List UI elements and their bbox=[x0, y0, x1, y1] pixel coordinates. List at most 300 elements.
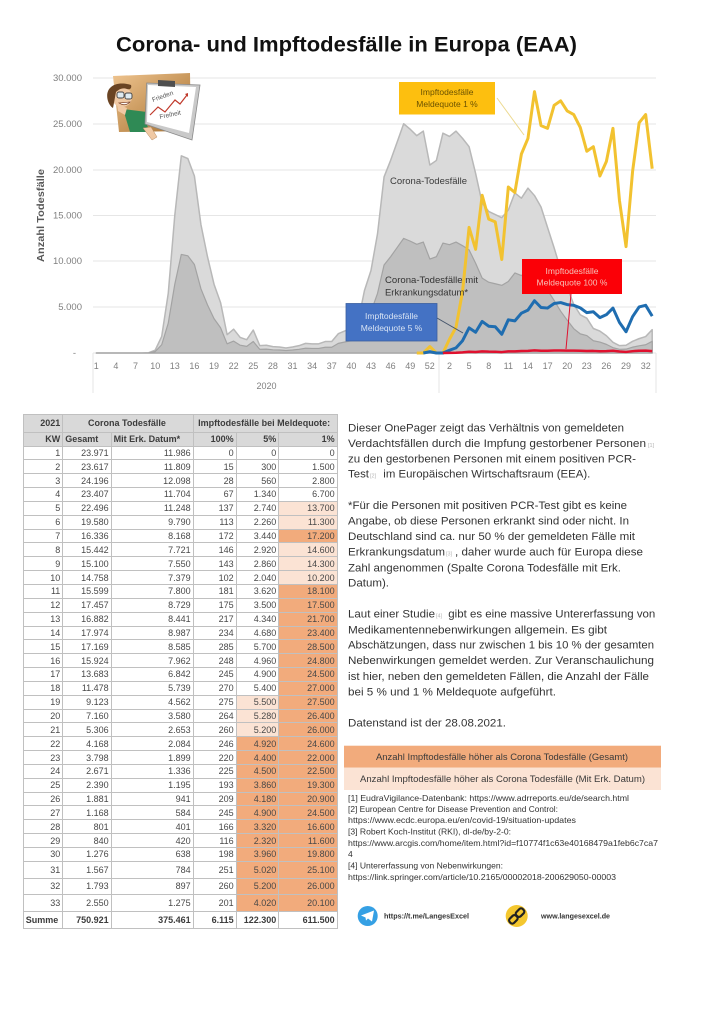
data table: weekly deaths 2021: 4.340 bbox=[254, 614, 276, 624]
data table: weekly deaths 2021: 22 bbox=[50, 739, 60, 749]
x axis labels: 17 bbox=[543, 361, 553, 371]
data table: weekly deaths 2021: 638 bbox=[176, 849, 191, 859]
data table: weekly deaths 2021: 67 bbox=[224, 489, 234, 499]
x axis labels: 1 bbox=[94, 361, 99, 371]
data table: weekly deaths 2021: 1.899 bbox=[168, 753, 191, 763]
data table: weekly deaths 2021: 20.900 bbox=[307, 794, 335, 804]
references list: [1] EudraVigilance-Datenbank: https://www.adrreports.eu/de/search.html bbox=[348, 793, 629, 803]
data table: weekly deaths 2021: 29 bbox=[50, 836, 60, 846]
data table: weekly deaths 2021: 24.196 bbox=[81, 476, 109, 486]
x axis labels: 23 bbox=[582, 361, 592, 371]
data table: weekly deaths 2021: 23.400 bbox=[307, 628, 335, 638]
data table: weekly deaths 2021: 14.758 bbox=[81, 573, 109, 583]
data table: weekly deaths 2021: 23.617 bbox=[81, 462, 109, 472]
data table: weekly deaths 2021: 2.550 bbox=[86, 898, 109, 908]
callout: Meldequote 100 %: Meldequote 100 % bbox=[537, 278, 608, 288]
data table: weekly deaths 2021: 2021 bbox=[40, 418, 60, 428]
x axis labels: 46 bbox=[386, 361, 396, 371]
data table: weekly deaths 2021: 5.020 bbox=[254, 865, 276, 875]
data table: weekly deaths 2021: 23.971 bbox=[81, 448, 109, 458]
data table: weekly deaths 2021: 5.280 bbox=[254, 711, 276, 721]
callout: Meldequote 5 % bbox=[346, 304, 463, 341]
x axis labels: 40 bbox=[346, 361, 356, 371]
data table: weekly deaths 2021: 5.200 bbox=[254, 881, 276, 891]
data table: weekly deaths 2021: 2.800 bbox=[312, 476, 335, 486]
data table: weekly deaths 2021: 3.320 bbox=[254, 822, 276, 832]
label: Corona-Todesfälle mit Erkrankungsdatum: Corona-Todesfälle mit bbox=[385, 275, 478, 286]
data table: weekly deaths 2021: 1.195 bbox=[168, 780, 191, 790]
data table: weekly deaths 2021: 248 bbox=[219, 656, 234, 666]
title: Corona- und Impftodesfälle in Europa (EAA) bbox=[116, 32, 577, 56]
data table: weekly deaths 2021: 21.700 bbox=[307, 614, 335, 624]
data table: weekly deaths 2021: 246 bbox=[219, 739, 234, 749]
references list: 4 bbox=[348, 849, 353, 859]
data table: weekly deaths 2021: 270 bbox=[219, 683, 234, 693]
data table: weekly deaths 2021: 4.180 bbox=[254, 794, 276, 804]
data table: weekly deaths 2021: Corona Todesfälle bbox=[88, 418, 166, 428]
y axis labels: 5.000 bbox=[58, 302, 82, 313]
data table: weekly deaths 2021: 251 bbox=[219, 865, 234, 875]
telegram link: https://t.me/LangesExcel bbox=[384, 912, 469, 920]
data table: weekly deaths 2021: 28.500 bbox=[307, 642, 335, 652]
data table: weekly deaths 2021: 611.500 bbox=[303, 915, 335, 925]
data table: weekly deaths 2021: 11.704 bbox=[164, 489, 191, 499]
data table: weekly deaths 2021: 4.168 bbox=[86, 739, 109, 749]
x axis labels: 25 bbox=[248, 361, 258, 371]
data table: weekly deaths 2021: 2.740 bbox=[254, 503, 276, 513]
data table: weekly deaths 2021: 4.020 bbox=[254, 898, 276, 908]
icon: cartoon man with clipboard bbox=[107, 73, 200, 140]
line: Meldequote 100 % bbox=[443, 350, 652, 353]
data table: weekly deaths 2021: 4.400 bbox=[254, 753, 276, 763]
icon: telegram bbox=[358, 906, 378, 926]
data table: weekly deaths 2021: 26.000 bbox=[307, 725, 335, 735]
data table: weekly deaths 2021: 3.960 bbox=[254, 849, 276, 859]
x axis labels: 14 bbox=[523, 361, 533, 371]
icon: website chain link bbox=[506, 905, 528, 927]
data table: weekly deaths 2021: 1.168 bbox=[86, 808, 109, 818]
data table: weekly deaths 2021: 4 bbox=[55, 489, 60, 499]
data table: weekly deaths 2021: 2.653 bbox=[168, 725, 191, 735]
data table: weekly deaths 2021: 2.260 bbox=[254, 517, 276, 527]
data table: weekly deaths 2021: 584 bbox=[176, 808, 191, 818]
data table: weekly deaths 2021: 7.962 bbox=[168, 656, 191, 666]
chart: Corona and vaccine deaths over time bbox=[35, 73, 656, 393]
data table: weekly deaths 2021: 31 bbox=[50, 865, 60, 875]
data table: weekly deaths 2021: 21 bbox=[50, 725, 60, 735]
y axis labels: 15.000 bbox=[53, 210, 82, 222]
data table: weekly deaths 2021: 16.882 bbox=[81, 614, 109, 624]
data table: weekly deaths 2021: 1.340 bbox=[254, 489, 276, 499]
callout: Meldequote 1 %: Meldequote 1 % bbox=[416, 99, 478, 109]
y axis labels: 30.000 bbox=[53, 73, 82, 84]
text block: study paragraph bbox=[348, 609, 655, 698]
data table: weekly deaths 2021: 4.500 bbox=[254, 766, 276, 776]
data table: weekly deaths 2021: 11.600 bbox=[308, 836, 335, 846]
x axis labels: 16 bbox=[189, 361, 199, 371]
data table: weekly deaths 2021: 1% bbox=[322, 434, 335, 444]
data table: weekly deaths 2021: 2.920 bbox=[254, 545, 276, 555]
data table: weekly deaths 2021: 7.550 bbox=[168, 559, 191, 569]
data table: weekly deaths 2021: 14.600 bbox=[307, 545, 335, 555]
data table: weekly deaths 2021: 1.793 bbox=[86, 881, 109, 891]
data table: weekly deaths 2021: 28 bbox=[224, 476, 234, 486]
data table: weekly deaths 2021: 181 bbox=[219, 586, 234, 596]
x axis labels: 5 bbox=[467, 361, 472, 371]
data table: weekly deaths 2021: 28 bbox=[50, 822, 60, 832]
data table: weekly deaths 2021: 19 bbox=[50, 697, 60, 707]
data table: weekly deaths 2021: 275 bbox=[219, 697, 234, 707]
y axis labels: 25.000 bbox=[53, 119, 82, 130]
legend: higher than total bbox=[344, 746, 661, 768]
data table: weekly deaths 2021: 300 bbox=[261, 462, 276, 472]
data table: weekly deaths 2021: Mit Erk. Datum* bbox=[114, 434, 180, 444]
area: Corona-Todesfälle mit Erkrankungsdatum bbox=[96, 238, 652, 353]
line: Meldequote 5 % bbox=[423, 301, 652, 353]
data table: weekly deaths 2021: 172 bbox=[219, 531, 234, 541]
data table: weekly deaths 2021: 15 bbox=[50, 642, 60, 652]
data table: weekly deaths 2021: 2.084 bbox=[168, 739, 191, 749]
text block: intro paragraph: im Europäischen Wirtschaftsraum (EEA). bbox=[383, 469, 590, 481]
data table: weekly deaths 2021: 166 bbox=[219, 822, 234, 832]
x axis labels: 32 bbox=[641, 361, 651, 371]
text block: study paragraph: bei 5 % und 1 % Meldequote aufgeführt. bbox=[348, 686, 556, 698]
text block: footnote on PCR tests: *Für die Personen mit positiven PCR-Test gibt es keine bbox=[348, 500, 627, 512]
legend: higher than with date of onset: Anzahl Impftodesfälle höher als Corona Todesfälle (Mit Erk. Datum) bbox=[360, 774, 645, 785]
data table: weekly deaths 2021: 1.567 bbox=[86, 865, 109, 875]
text block: study paragraph: gibt es eine massive Untererfassung von bbox=[448, 609, 655, 621]
data table: weekly deaths 2021: 6.700 bbox=[312, 489, 335, 499]
data table: weekly deaths 2021: 13 bbox=[50, 614, 60, 624]
text block: study paragraph: ist hier, neben den gemeldeten Fällen, die Anzahl der Fälle bbox=[348, 671, 649, 683]
data table: weekly deaths 2021: 17.200 bbox=[307, 531, 335, 541]
data table: weekly deaths 2021: 15.599 bbox=[81, 586, 109, 596]
text block: study paragraph: Laut einer Studie bbox=[348, 609, 435, 621]
data table: weekly deaths 2021: 10.200 bbox=[307, 573, 335, 583]
data table: weekly deaths 2021: 5.700 bbox=[254, 642, 276, 652]
data table: weekly deaths 2021: 17 bbox=[50, 669, 60, 679]
data table: weekly deaths 2021: 14 bbox=[50, 628, 60, 638]
data table: weekly deaths 2021: 245 bbox=[219, 808, 234, 818]
x axis labels: 10 bbox=[150, 361, 160, 371]
data table: weekly deaths 2021: 24.800 bbox=[307, 656, 335, 666]
legend: higher than total: Anzahl Impftodesfälle höher als Corona Todesfälle (Gesamt) bbox=[376, 752, 628, 763]
data table: weekly deaths 2021: 6.115 bbox=[212, 915, 234, 925]
data table: weekly deaths 2021: 15.924 bbox=[81, 656, 109, 666]
data table: weekly deaths 2021: 22.500 bbox=[307, 766, 335, 776]
data table: weekly deaths 2021 bbox=[23, 414, 338, 929]
references list: [4] Untererfassung von Nebenwirkungen: bbox=[348, 860, 503, 870]
data table: weekly deaths 2021: 116 bbox=[219, 836, 234, 846]
data table: weekly deaths 2021: 2.320 bbox=[254, 836, 276, 846]
x axis labels: 29 bbox=[621, 361, 631, 371]
label: Corona-Todesfälle mit Erkrankungsdatum: Erkrankungsdatum* bbox=[385, 288, 468, 298]
area: Corona-Todesfälle gesamt bbox=[96, 124, 652, 353]
data table: weekly deaths 2021: 9 bbox=[55, 559, 60, 569]
data table: weekly deaths 2021: 7.160 bbox=[86, 711, 109, 721]
text block: footnote on PCR tests bbox=[348, 500, 643, 590]
data table: weekly deaths 2021: 12 bbox=[50, 600, 60, 610]
x axis labels: 22 bbox=[229, 361, 239, 371]
data table: weekly deaths 2021: 4.920 bbox=[254, 739, 276, 749]
data table: weekly deaths 2021: 8 bbox=[55, 545, 60, 555]
y axis labels bbox=[53, 73, 82, 359]
text block: footnote on PCR tests: Deutschland sind ca. nur 50 % der gemeldeten Fälle mit bbox=[348, 531, 635, 543]
data table: weekly deaths 2021: 14.300 bbox=[307, 559, 335, 569]
data table: weekly deaths 2021: 17.457 bbox=[81, 600, 109, 610]
data table: weekly deaths 2021: 941 bbox=[176, 794, 191, 804]
data table: weekly deaths 2021: 27.000 bbox=[307, 683, 335, 693]
data table: weekly deaths 2021: 3.620 bbox=[254, 586, 276, 596]
text block: footnote on PCR tests: Angabe, ob diese Personen erkrankt sind oder nicht. In bbox=[348, 516, 629, 528]
text block: study paragraph: Nebenwirkungen gemeldet werden. Zur Veranschaulichung bbox=[348, 655, 654, 667]
data table: weekly deaths 2021: 15.100 bbox=[81, 559, 109, 569]
data table: weekly deaths 2021: 6 bbox=[55, 517, 60, 527]
data table: weekly deaths 2021: 11.478 bbox=[82, 683, 109, 693]
data table: weekly deaths 2021: 24.500 bbox=[307, 669, 335, 679]
data table: weekly deaths 2021: 17.169 bbox=[81, 642, 109, 652]
data table: weekly deaths 2021: 26.400 bbox=[307, 711, 335, 721]
data table: weekly deaths 2021: 12.098 bbox=[163, 476, 191, 486]
references list: https://link.springer.com/article/10.2165/00002018-200629050-00003 bbox=[348, 872, 616, 882]
text block: intro paragraph: [1] bbox=[648, 443, 655, 449]
data table: weekly deaths 2021: 1.276 bbox=[86, 849, 109, 859]
data table: weekly deaths 2021: 5.200 bbox=[254, 725, 276, 735]
x axis labels: 28 bbox=[268, 361, 278, 371]
references list: [2] European Centre for Disease Prevention and Control: bbox=[348, 804, 558, 814]
x axis labels: 37 bbox=[327, 361, 337, 371]
data table: weekly deaths 2021: 801 bbox=[94, 822, 109, 832]
data table: weekly deaths 2021: 20.100 bbox=[307, 898, 335, 908]
data table: weekly deaths 2021: 15.442 bbox=[81, 545, 109, 555]
y axis labels: 20.000 bbox=[53, 165, 82, 176]
x axis labels: 52 bbox=[425, 361, 435, 371]
data table: weekly deaths 2021: 19.300 bbox=[307, 780, 335, 790]
data table: weekly deaths 2021: 32 bbox=[50, 881, 60, 891]
data table: weekly deaths 2021: 234 bbox=[219, 628, 234, 638]
line: Meldequote 1 % bbox=[417, 92, 652, 353]
data table: weekly deaths 2021: 1.336 bbox=[168, 766, 191, 776]
data table: weekly deaths 2021: 17.500 bbox=[307, 600, 335, 610]
data table: weekly deaths 2021: 30 bbox=[50, 849, 60, 859]
data table: weekly deaths 2021: 897 bbox=[176, 881, 191, 891]
data table: weekly deaths 2021: 4.900 bbox=[254, 808, 276, 818]
x axis labels: 19 bbox=[209, 361, 219, 371]
data table: weekly deaths 2021: 122.300 bbox=[244, 915, 276, 925]
icon: cartoon man with clipboard: Freiheit bbox=[159, 110, 182, 121]
x axis labels: 8 bbox=[486, 361, 491, 371]
data table: weekly deaths 2021: 25.100 bbox=[307, 865, 335, 875]
data table: weekly deaths 2021: 220 bbox=[219, 753, 234, 763]
legend: higher than with date of onset bbox=[344, 768, 661, 790]
data table: weekly deaths 2021: 17.974 bbox=[81, 628, 109, 638]
x axis labels: 11 bbox=[504, 361, 513, 371]
data table: weekly deaths 2021: 143 bbox=[219, 559, 234, 569]
data table: weekly deaths 2021: 7.379 bbox=[168, 573, 191, 583]
data table: weekly deaths 2021: 100% bbox=[211, 434, 234, 444]
data table: weekly deaths 2021: 20 bbox=[50, 711, 60, 721]
data table: weekly deaths 2021: 420 bbox=[176, 836, 191, 846]
data table: weekly deaths 2021: Gesamt bbox=[65, 434, 98, 444]
data table: weekly deaths 2021: 25 bbox=[50, 780, 60, 790]
data table: weekly deaths 2021: 209 bbox=[219, 794, 234, 804]
text block: intro paragraph bbox=[348, 423, 655, 481]
data table: weekly deaths 2021: 560 bbox=[261, 476, 276, 486]
data table: weekly deaths 2021: 2 bbox=[55, 462, 60, 472]
data table: weekly deaths 2021: 4.680 bbox=[254, 628, 276, 638]
data table: weekly deaths 2021: 750.921 bbox=[76, 915, 109, 925]
data table: weekly deaths 2021: 24 bbox=[50, 766, 60, 776]
data table: weekly deaths 2021: 6.842 bbox=[168, 669, 191, 679]
text block: data date: Datenstand ist der 28.08.2021. bbox=[348, 717, 506, 729]
x axis labels: 20 bbox=[562, 361, 572, 371]
data table: weekly deaths 2021: 264 bbox=[219, 711, 234, 721]
data table: weekly deaths 2021: 8.729 bbox=[168, 600, 191, 610]
x axis labels: 31 bbox=[287, 361, 298, 371]
x axis labels bbox=[94, 361, 651, 371]
text block: footnote on PCR tests: Zahl angenommen (Spalte Corona Todesfälle mit Erk. bbox=[348, 562, 621, 574]
data table: weekly deaths 2021: KW bbox=[45, 434, 60, 444]
data table: weekly deaths 2021: 175 bbox=[219, 600, 234, 610]
x axis labels: 34 bbox=[307, 361, 317, 371]
data table: weekly deaths 2021: 8.168 bbox=[168, 531, 191, 541]
data table: weekly deaths 2021: 5 bbox=[55, 503, 60, 513]
data table: weekly deaths 2021: 26 bbox=[50, 794, 60, 804]
data table: weekly deaths 2021: 27.500 bbox=[307, 697, 335, 707]
data table: weekly deaths 2021: 5.400 bbox=[254, 683, 276, 693]
text block: footnote on PCR tests: , daher wurde auch für Europa diese bbox=[455, 546, 643, 558]
data table: weekly deaths 2021: 7.721 bbox=[168, 545, 191, 555]
y axis labels: 10.000 bbox=[53, 256, 82, 267]
data table: weekly deaths 2021: 4.960 bbox=[254, 656, 276, 666]
data table: weekly deaths 2021: 0 bbox=[229, 448, 234, 458]
data table: weekly deaths 2021: 2.040 bbox=[254, 573, 276, 583]
callout: Meldequote 100 % bbox=[522, 259, 622, 349]
data table: weekly deaths 2021: 401 bbox=[176, 822, 191, 832]
text block: intro paragraph: [2] bbox=[370, 474, 377, 480]
data table: weekly deaths 2021: Summe bbox=[26, 915, 58, 925]
data table: weekly deaths 2021: 260 bbox=[219, 725, 234, 735]
text block: intro paragraph: Test bbox=[348, 469, 369, 481]
data table: weekly deaths 2021: 137 bbox=[219, 503, 234, 513]
data table: weekly deaths 2021: 22.000 bbox=[307, 753, 335, 763]
label: Corona-Todesfälle: Corona-Todesfälle bbox=[390, 176, 467, 187]
icon: cartoon man with clipboard: Frieden bbox=[151, 90, 175, 104]
data table: weekly deaths 2021: 26.000 bbox=[307, 881, 335, 891]
data table: weekly deaths 2021: 11 bbox=[51, 586, 60, 596]
data table: weekly deaths 2021: 18 bbox=[50, 683, 60, 693]
text block: intro paragraph: Dieser OnePager zeigt das Verhältnis von gemeldeten bbox=[348, 423, 624, 435]
data table: weekly deaths 2021: 193 bbox=[219, 780, 234, 790]
data table: weekly deaths 2021: 102 bbox=[219, 573, 234, 583]
data table: weekly deaths 2021: 260 bbox=[219, 881, 234, 891]
data table: weekly deaths 2021: 9.790 bbox=[168, 517, 191, 527]
data table: weekly deaths 2021: 375.461 bbox=[158, 915, 191, 925]
data table: weekly deaths 2021: 784 bbox=[176, 865, 191, 875]
data table: weekly deaths 2021: 217 bbox=[219, 614, 234, 624]
data table: weekly deaths 2021: 225 bbox=[219, 766, 234, 776]
data table: weekly deaths 2021: 0 bbox=[330, 448, 335, 458]
text block: footnote on PCR tests: Erkrankungsdatum bbox=[348, 546, 445, 558]
x axis labels: 43 bbox=[366, 361, 376, 371]
x axis labels: 7 bbox=[133, 361, 138, 371]
references list bbox=[348, 793, 658, 882]
data table: weekly deaths 2021: 33 bbox=[50, 898, 60, 908]
references list: [3] Robert Koch-Institut (RKI), dl-de/by-2-0: bbox=[348, 826, 511, 836]
data table: weekly deaths 2021: 11.986 bbox=[164, 448, 191, 458]
data table: weekly deaths 2021: 9.123 bbox=[86, 697, 109, 707]
data table: weekly deaths 2021: Impftodesfälle bei Meldequote: bbox=[198, 418, 330, 428]
x axis labels: 2 bbox=[447, 361, 452, 371]
data table: weekly deaths 2021: 201 bbox=[219, 898, 234, 908]
data table: weekly deaths 2021: 24.500 bbox=[307, 808, 335, 818]
x axis labels: 49 bbox=[405, 361, 415, 371]
y axis labels: - bbox=[73, 348, 76, 359]
data table: weekly deaths 2021: 23 bbox=[50, 753, 60, 763]
data table: weekly deaths 2021: 285 bbox=[219, 642, 234, 652]
y axis title: Anzahl Todesfälle bbox=[35, 169, 47, 262]
data table: weekly deaths 2021: 146 bbox=[219, 545, 234, 555]
data table: weekly deaths 2021: 3.440 bbox=[254, 531, 276, 541]
year label 2020: 2020 bbox=[256, 381, 277, 391]
data table: weekly deaths 2021: 8.987 bbox=[168, 628, 191, 638]
text block: intro paragraph: zu den gestorbenen Personen mit einem positiven PCR- bbox=[348, 453, 636, 465]
data table: weekly deaths 2021: 13.700 bbox=[307, 503, 335, 513]
data table: weekly deaths 2021: 245 bbox=[219, 669, 234, 679]
data table: weekly deaths 2021: 840 bbox=[94, 836, 109, 846]
data table: weekly deaths 2021: 15 bbox=[224, 462, 234, 472]
data table: weekly deaths 2021: 23.407 bbox=[81, 489, 109, 499]
text block: intro paragraph: Verdachtsfällen durch die Impfung gestorbener Personen bbox=[348, 438, 646, 450]
callout: Meldequote 5 %: Impftodesfälle bbox=[365, 311, 418, 321]
data table: weekly deaths 2021: 1.881 bbox=[86, 794, 109, 804]
data table: weekly deaths 2021: 1 bbox=[55, 448, 60, 458]
label: Corona-Todesfälle mit Erkrankungsdatum bbox=[385, 275, 478, 298]
data table: weekly deaths 2021: 0 bbox=[271, 448, 276, 458]
data table: weekly deaths 2021: 7.800 bbox=[168, 586, 191, 596]
data table: weekly deaths 2021: 2.860 bbox=[254, 559, 276, 569]
data table: weekly deaths 2021: 1.275 bbox=[168, 898, 191, 908]
data table: weekly deaths 2021: 11.300 bbox=[308, 517, 335, 527]
callout: Meldequote 1 % bbox=[399, 82, 524, 135]
x axis labels: 13 bbox=[170, 361, 180, 371]
data table: weekly deaths 2021: 7 bbox=[55, 531, 60, 541]
references list: https://www.arcgis.com/home/item.html?id=f10774f1c63e40168479a1feb6c7ca7 bbox=[348, 838, 658, 848]
x axis labels: 4 bbox=[113, 361, 118, 371]
x axis labels: 26 bbox=[601, 361, 611, 371]
data table: weekly deaths 2021: 4.900 bbox=[254, 669, 276, 679]
references list: https://www.ecdc.europa.eu/en/covid-19/situation-updates bbox=[348, 815, 576, 825]
data table: weekly deaths 2021: 22.496 bbox=[81, 503, 109, 513]
data table: weekly deaths 2021: 11.248 bbox=[164, 503, 191, 513]
data table: weekly deaths 2021: 8.441 bbox=[168, 614, 191, 624]
data table: weekly deaths 2021: 4.562 bbox=[168, 697, 191, 707]
data table: weekly deaths 2021: 16 bbox=[50, 656, 60, 666]
callout: Meldequote 5 %: Meldequote 5 % bbox=[361, 323, 423, 333]
data table: weekly deaths 2021: 3 bbox=[55, 476, 60, 486]
text block: footnote on PCR tests: [3] bbox=[446, 551, 453, 557]
data table: weekly deaths 2021: 5% bbox=[263, 434, 276, 444]
data table: weekly deaths 2021: 3.798 bbox=[86, 753, 109, 763]
data table: weekly deaths 2021: 16.336 bbox=[81, 531, 109, 541]
data table: weekly deaths 2021: 5.500 bbox=[254, 697, 276, 707]
data table: weekly deaths 2021: 3.500 bbox=[254, 600, 276, 610]
data table: weekly deaths 2021: 10 bbox=[50, 573, 60, 583]
data table: weekly deaths 2021: 24.600 bbox=[307, 739, 335, 749]
data table: weekly deaths 2021: 27 bbox=[50, 808, 60, 818]
data table: weekly deaths 2021: 5.739 bbox=[168, 683, 191, 693]
data table: weekly deaths 2021: 198 bbox=[219, 849, 234, 859]
